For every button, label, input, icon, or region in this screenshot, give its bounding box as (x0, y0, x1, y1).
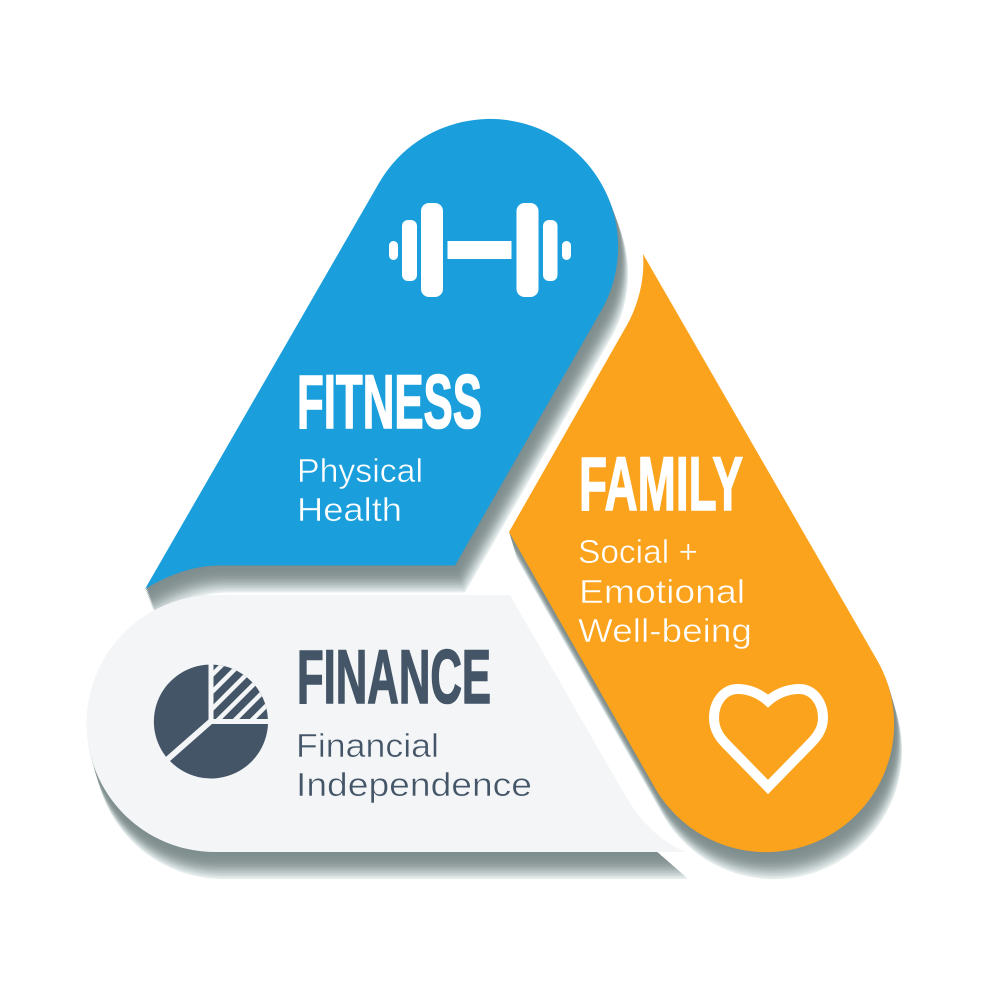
fitness shape (145, 119, 618, 589)
icon: heart (714, 689, 823, 787)
family shadow (509, 256, 902, 879)
finance shadow (88, 744, 687, 879)
finance subtitle: Financial (296, 727, 439, 764)
finance shape (86, 595, 686, 852)
family heading: FAMILY (579, 442, 743, 527)
family subtitle: Well-being (578, 612, 752, 649)
family shape (509, 254, 894, 852)
family subtitle: Social + (578, 533, 698, 570)
finance subtitle: Independence (296, 766, 532, 803)
fitness subtitle: Physical (297, 452, 423, 489)
fitness shadow (146, 120, 628, 616)
family subtitle: Emotional (579, 573, 745, 610)
panel: finance (86, 595, 708, 879)
panel: family (509, 254, 902, 879)
finance heading: FINANCE (297, 635, 491, 720)
panel: fitness (145, 119, 628, 616)
icon: pie chart (154, 664, 268, 778)
fitness heading: FITNESS (297, 360, 482, 445)
icon: dumbbell (389, 203, 571, 297)
fitness subtitle: Health (297, 491, 402, 528)
